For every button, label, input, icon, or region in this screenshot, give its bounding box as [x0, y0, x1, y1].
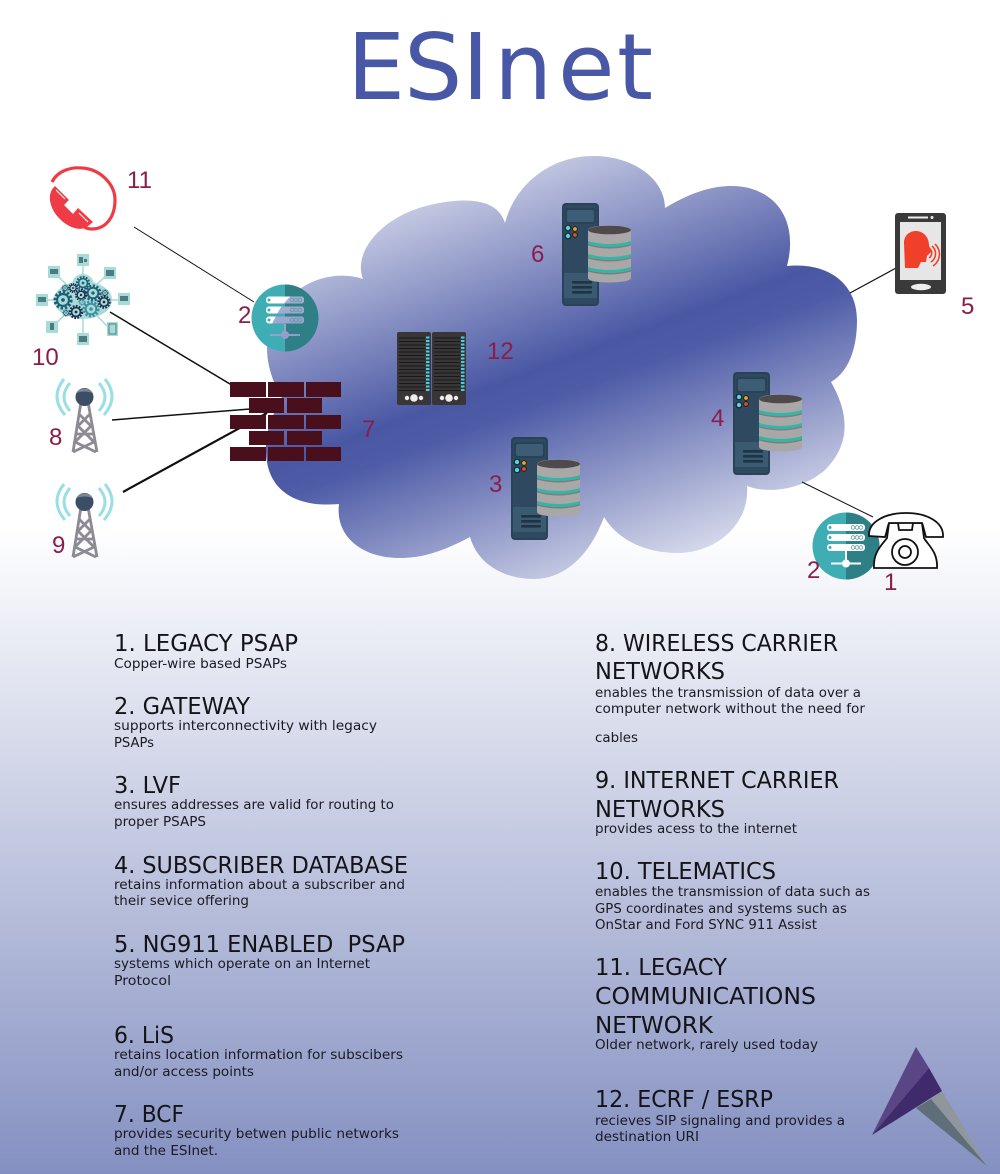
legend item 8: NETWORKS	[595, 659, 725, 685]
number 7: 7	[362, 416, 375, 443]
legend item 8: computer network without the need for	[595, 702, 866, 717]
legend item 10: enables the transmission of data such as	[595, 885, 870, 900]
panel: legend left column	[114, 631, 408, 1159]
legend item 9	[595, 768, 839, 837]
legend item 3: 3. LVF	[114, 773, 181, 799]
legend item 12: destination URI	[595, 1130, 699, 1145]
number 8: 8	[49, 424, 62, 451]
legend item 11: 11. LEGACY	[595, 955, 728, 981]
legend item 10: 10. TELEMATICS	[595, 859, 776, 885]
legend item 8	[595, 631, 866, 746]
legend item 10: GPS coordinates and systems such as	[595, 902, 847, 917]
legend item 8: 8. WIRELESS CARRIER	[595, 631, 838, 657]
legend item 5: systems which operate on an Internet	[114, 957, 370, 972]
number 4: 4	[711, 405, 724, 432]
legend item 8: cables	[595, 731, 638, 746]
legend item 5: 5. NG911 ENABLED PSAP	[114, 932, 405, 958]
legend item 1: Copper-wire based PSAPs	[114, 657, 287, 672]
legend item 2: supports interconnectivity with legacy	[114, 719, 377, 734]
connector lines	[110, 227, 896, 517]
legend item 8: enables the transmission of data over a	[595, 686, 861, 701]
number 11: 11	[127, 167, 152, 194]
icon: legacy desk telephone	[869, 513, 943, 568]
legend item 4: 4. SUBSCRIBER DATABASE	[114, 853, 408, 879]
legend item 12: 12. ECRF / ESRP	[595, 1087, 773, 1113]
icon: wireless tower 8	[57, 379, 112, 452]
legend item 2: PSAPs	[114, 736, 154, 751]
number 1: 1	[884, 569, 897, 596]
icon: wireless tower 9	[57, 484, 112, 557]
legend item 12: recieves SIP signaling and provides a	[595, 1114, 845, 1129]
legend item 6: retains location information for subscibers	[114, 1048, 403, 1063]
legend item 3: proper PSAPS	[114, 815, 206, 830]
icon: subscriber database server	[733, 372, 802, 475]
legend item 6	[114, 1023, 403, 1080]
icon: ECRF/ESRP server racks	[397, 332, 466, 405]
legend item 3	[114, 773, 394, 830]
cloud: ESInet network	[266, 156, 857, 579]
legend item 4: retains information about a subscriber and	[114, 878, 405, 893]
legend item 6: and/or access points	[114, 1065, 254, 1080]
number 10: 10	[32, 344, 59, 371]
legend item 10	[595, 859, 870, 933]
legend item 7: and the ESInet.	[114, 1144, 218, 1159]
icon: red legacy phone	[50, 168, 115, 229]
panel: legend right column	[595, 631, 870, 1145]
icon: gateway, upper	[252, 284, 318, 352]
legend item 7	[114, 1102, 399, 1159]
legend item 7: provides security betwen public networks	[114, 1127, 399, 1142]
legend item 6: 6. LiS	[114, 1023, 174, 1049]
legend item 11: NETWORK	[595, 1013, 714, 1039]
legend item 9: NETWORKS	[595, 797, 725, 823]
number 5: 5	[961, 293, 974, 320]
legend item 11: Older network, rarely used today	[595, 1038, 818, 1053]
number 2, lower gateway: 2	[807, 557, 820, 584]
legend item 1	[114, 631, 298, 672]
number 6: 6	[531, 241, 544, 268]
icon: firewall bricks	[230, 382, 341, 461]
legend item 9: provides acess to the internet	[595, 822, 797, 837]
legend item 5	[114, 932, 405, 989]
icon: gateway, lower	[812, 512, 880, 580]
legend item 4: their sevice offering	[114, 894, 249, 909]
legend item 2: 2. GATEWAY	[114, 694, 251, 720]
legend item 7: 7. BCF	[114, 1102, 184, 1128]
legend item 11	[595, 955, 818, 1053]
icon: smartphone with speaking head	[895, 213, 946, 294]
legend item 10: OnStar and Ford SYNC 911 Assist	[595, 918, 817, 933]
icon: LVF server and database	[511, 437, 580, 540]
number 9: 9	[52, 532, 65, 559]
icon: LIS server and database	[562, 203, 631, 306]
legend item 3: ensures addresses are valid for routing to	[114, 798, 394, 813]
legend item 4	[114, 853, 408, 909]
legend item 9: 9. INTERNET CARRIER	[595, 768, 839, 794]
number 3: 3	[489, 471, 502, 498]
number 2, upper gateway: 2	[238, 302, 251, 329]
legend item 2	[114, 694, 377, 751]
icon: telematics cloud of gears	[36, 254, 130, 345]
legend item 5: Protocol	[114, 974, 171, 989]
icon: arrow logo	[872, 1047, 987, 1166]
number 12: 12	[487, 338, 514, 365]
legend item 12	[595, 1087, 845, 1145]
legend item 11: COMMUNICATIONS	[595, 984, 816, 1010]
legend item 1: 1. LEGACY PSAP	[114, 631, 298, 657]
title: ESInet	[347, 14, 653, 121]
